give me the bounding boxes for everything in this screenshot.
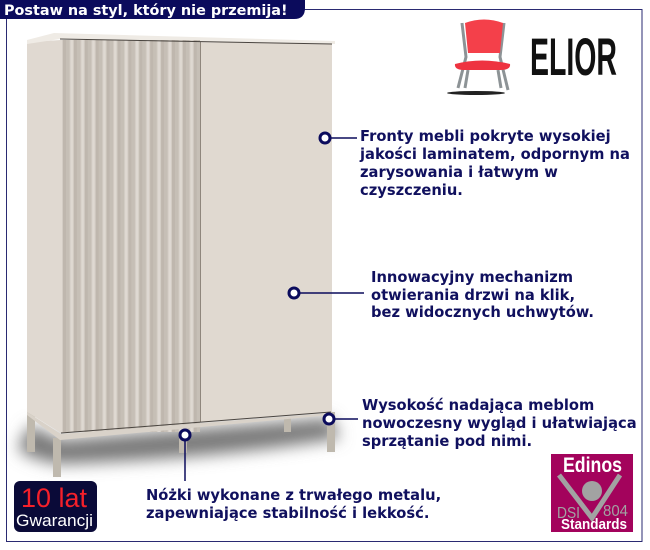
- right door: [201, 43, 331, 421]
- callout text: Innowacyjny mechanizm: [371, 269, 573, 286]
- fluted left door: [62, 40, 200, 432]
- badge: Edinos DSI 804 Standards: [551, 454, 633, 533]
- icon: red chair: [447, 20, 510, 95]
- badge: 10 lat warranty: [14, 481, 97, 532]
- callout text: bez widocznych uchwytów.: [371, 304, 594, 321]
- callout text: Fronty mebli pokryte wysokiej: [360, 128, 611, 145]
- callout text: Wysokość nadająca meblom: [362, 397, 594, 414]
- callout text: zapewniające stabilność i lekkość.: [146, 505, 429, 522]
- cabinet top: [27, 33, 335, 44]
- header title: Postaw na styl, który nie przemija!: [4, 3, 288, 19]
- logo: ELIOR: [447, 20, 617, 95]
- badge: Edinos DSI 804 Standards: Edinos: [563, 454, 622, 477]
- callout: fronts: [320, 128, 630, 199]
- callout: click mechanism: [289, 269, 594, 321]
- cabinet body: [27, 40, 332, 433]
- header banner: [0, 0, 305, 19]
- callout text: sprzątanie pod nimi.: [362, 433, 532, 450]
- furniture image: cabinet: [18, 33, 340, 477]
- badge: 10 lat warranty: Gwarancji: [16, 511, 93, 530]
- base: [27, 412, 331, 440]
- callout: height: [324, 397, 637, 450]
- badge: 10 lat warranty: 10 lat: [21, 483, 87, 513]
- badge: Edinos DSI 804 Standards: Standards: [561, 516, 627, 533]
- callout text: nowoczesny wygląd i ułatwiająca: [362, 415, 637, 432]
- callout text: Nóżki wykonane z trwałego metalu,: [146, 487, 441, 504]
- callout text: otwierania drzwi na klik,: [371, 287, 575, 304]
- callout text: jakości laminatem, odpornym na: [359, 146, 630, 163]
- callout: legs: [146, 430, 441, 522]
- callout text: zarysowania i łatwym w: [360, 164, 558, 181]
- callout text: czyszczeniu.: [360, 182, 463, 199]
- floor shadow: [18, 418, 340, 464]
- badge: Edinos DSI 804 Standards: 804: [603, 503, 628, 520]
- legs: [27, 412, 335, 477]
- badge: Edinos DSI 804 Standards: DSI: [557, 505, 580, 522]
